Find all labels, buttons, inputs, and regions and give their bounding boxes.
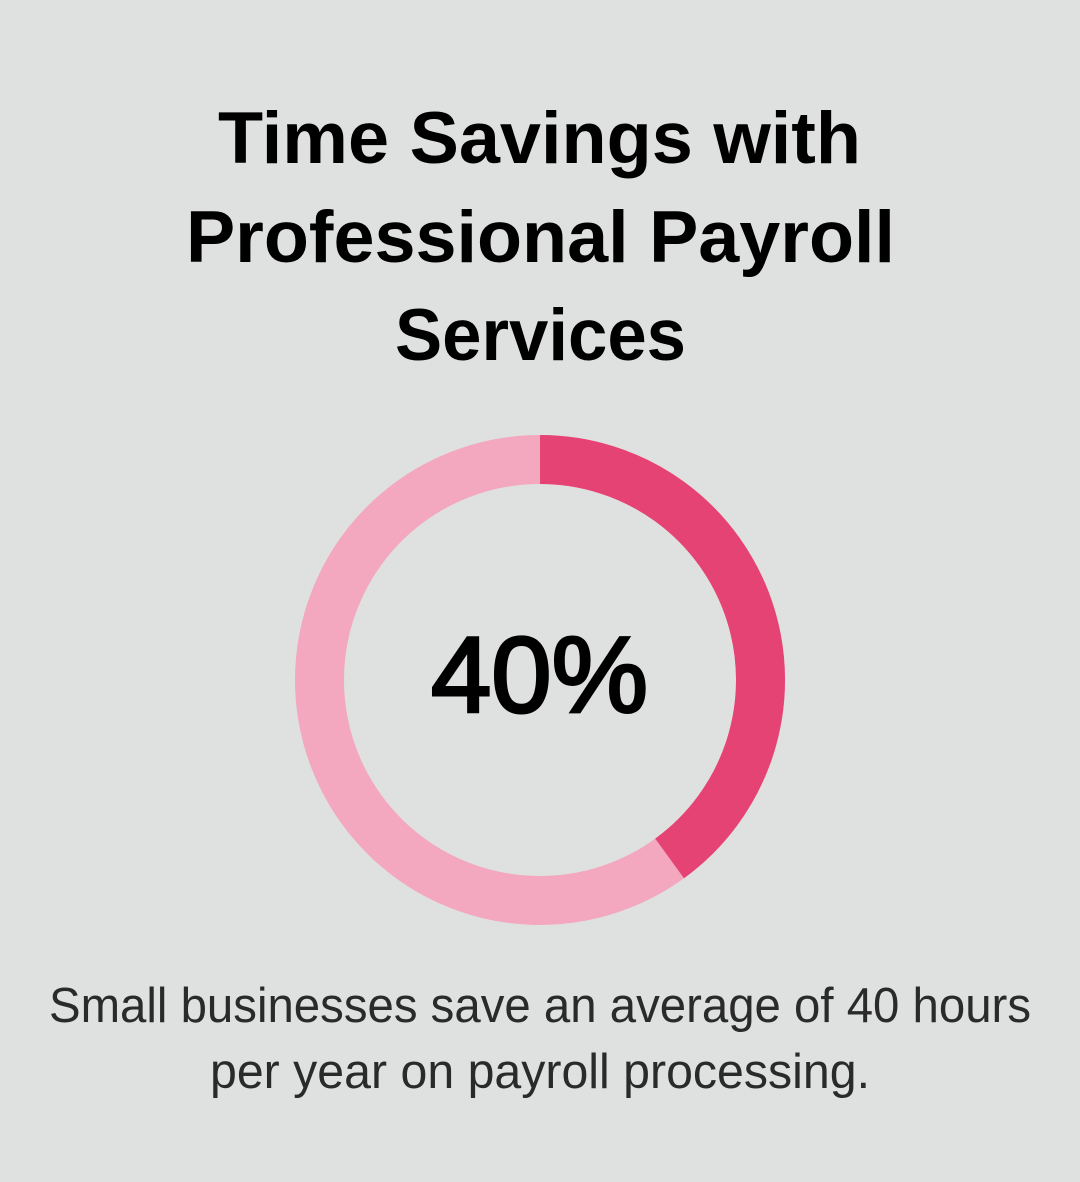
- donut chart: 40%: [320, 460, 761, 900]
- donut value: 40%: 40%: [431, 614, 648, 735]
- description text: Small businesses save an average of 40 hours: [49, 979, 1031, 1033]
- title: Services: [395, 295, 686, 376]
- description text: per year on payroll processing.: [210, 1045, 870, 1099]
- title: Time Savings with: [218, 98, 861, 179]
- title: [186, 98, 895, 376]
- title: Professional Payroll: [186, 197, 895, 278]
- description text: [49, 979, 1031, 1099]
